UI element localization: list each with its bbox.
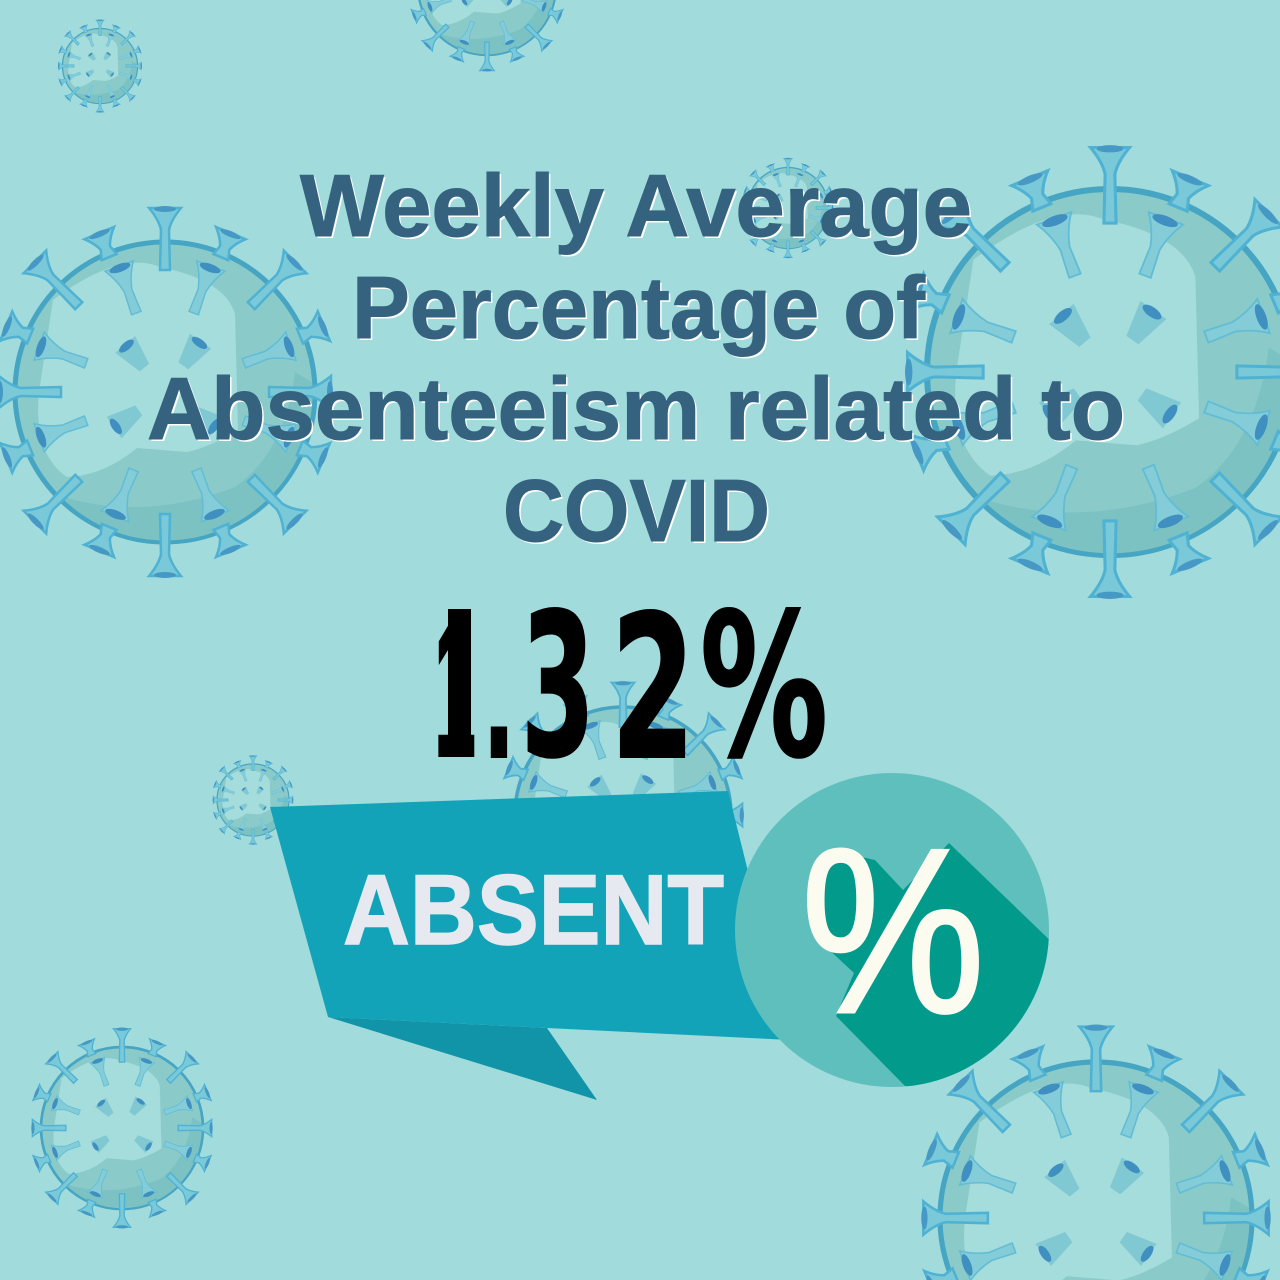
big number 1.32%: 2: [611, 573, 695, 804]
title: Absenteeism related to: [149, 361, 1127, 460]
icon: virus right large: [905, 145, 1280, 599]
ribbon body: [270, 791, 790, 1040]
title: Weekly Average: [300, 156, 972, 255]
icon: virus top centre cropped: [410, 0, 564, 72]
icon: virus top left small: [58, 20, 142, 112]
title: [147, 156, 1127, 562]
icon: virus left large: [0, 206, 333, 578]
ribbon tail: [328, 1017, 597, 1100]
big number 1.32%: .: [484, 578, 514, 799]
title: COVID: [505, 463, 772, 562]
big number 1.32%: [434, 571, 828, 804]
banner: absent ribbon: [270, 791, 790, 1100]
icon: virus behind title small: [743, 158, 833, 258]
percent sign: %: [801, 799, 985, 1062]
title: Percentage of: [352, 258, 926, 357]
big number 1.32%: 3: [521, 571, 595, 802]
icon: virus small near banner: [213, 755, 293, 845]
percent badge: [735, 773, 1060, 1100]
icon: virus behind number: [502, 681, 744, 949]
big number 1.32%: %: [700, 571, 828, 802]
title: Percentage of: [354, 260, 928, 359]
icon: virus bottom right: [921, 1025, 1271, 1280]
badge disc: [735, 773, 1049, 1087]
title: COVID: [503, 461, 770, 560]
big number 1.32%: 1: [434, 577, 476, 798]
banner label: ABSENT: [343, 854, 724, 965]
long shadow: [824, 843, 1049, 1086]
title: Absenteeism related to: [147, 359, 1125, 458]
title: Weekly Average: [302, 158, 974, 257]
icon: virus bottom left: [31, 1028, 213, 1228]
